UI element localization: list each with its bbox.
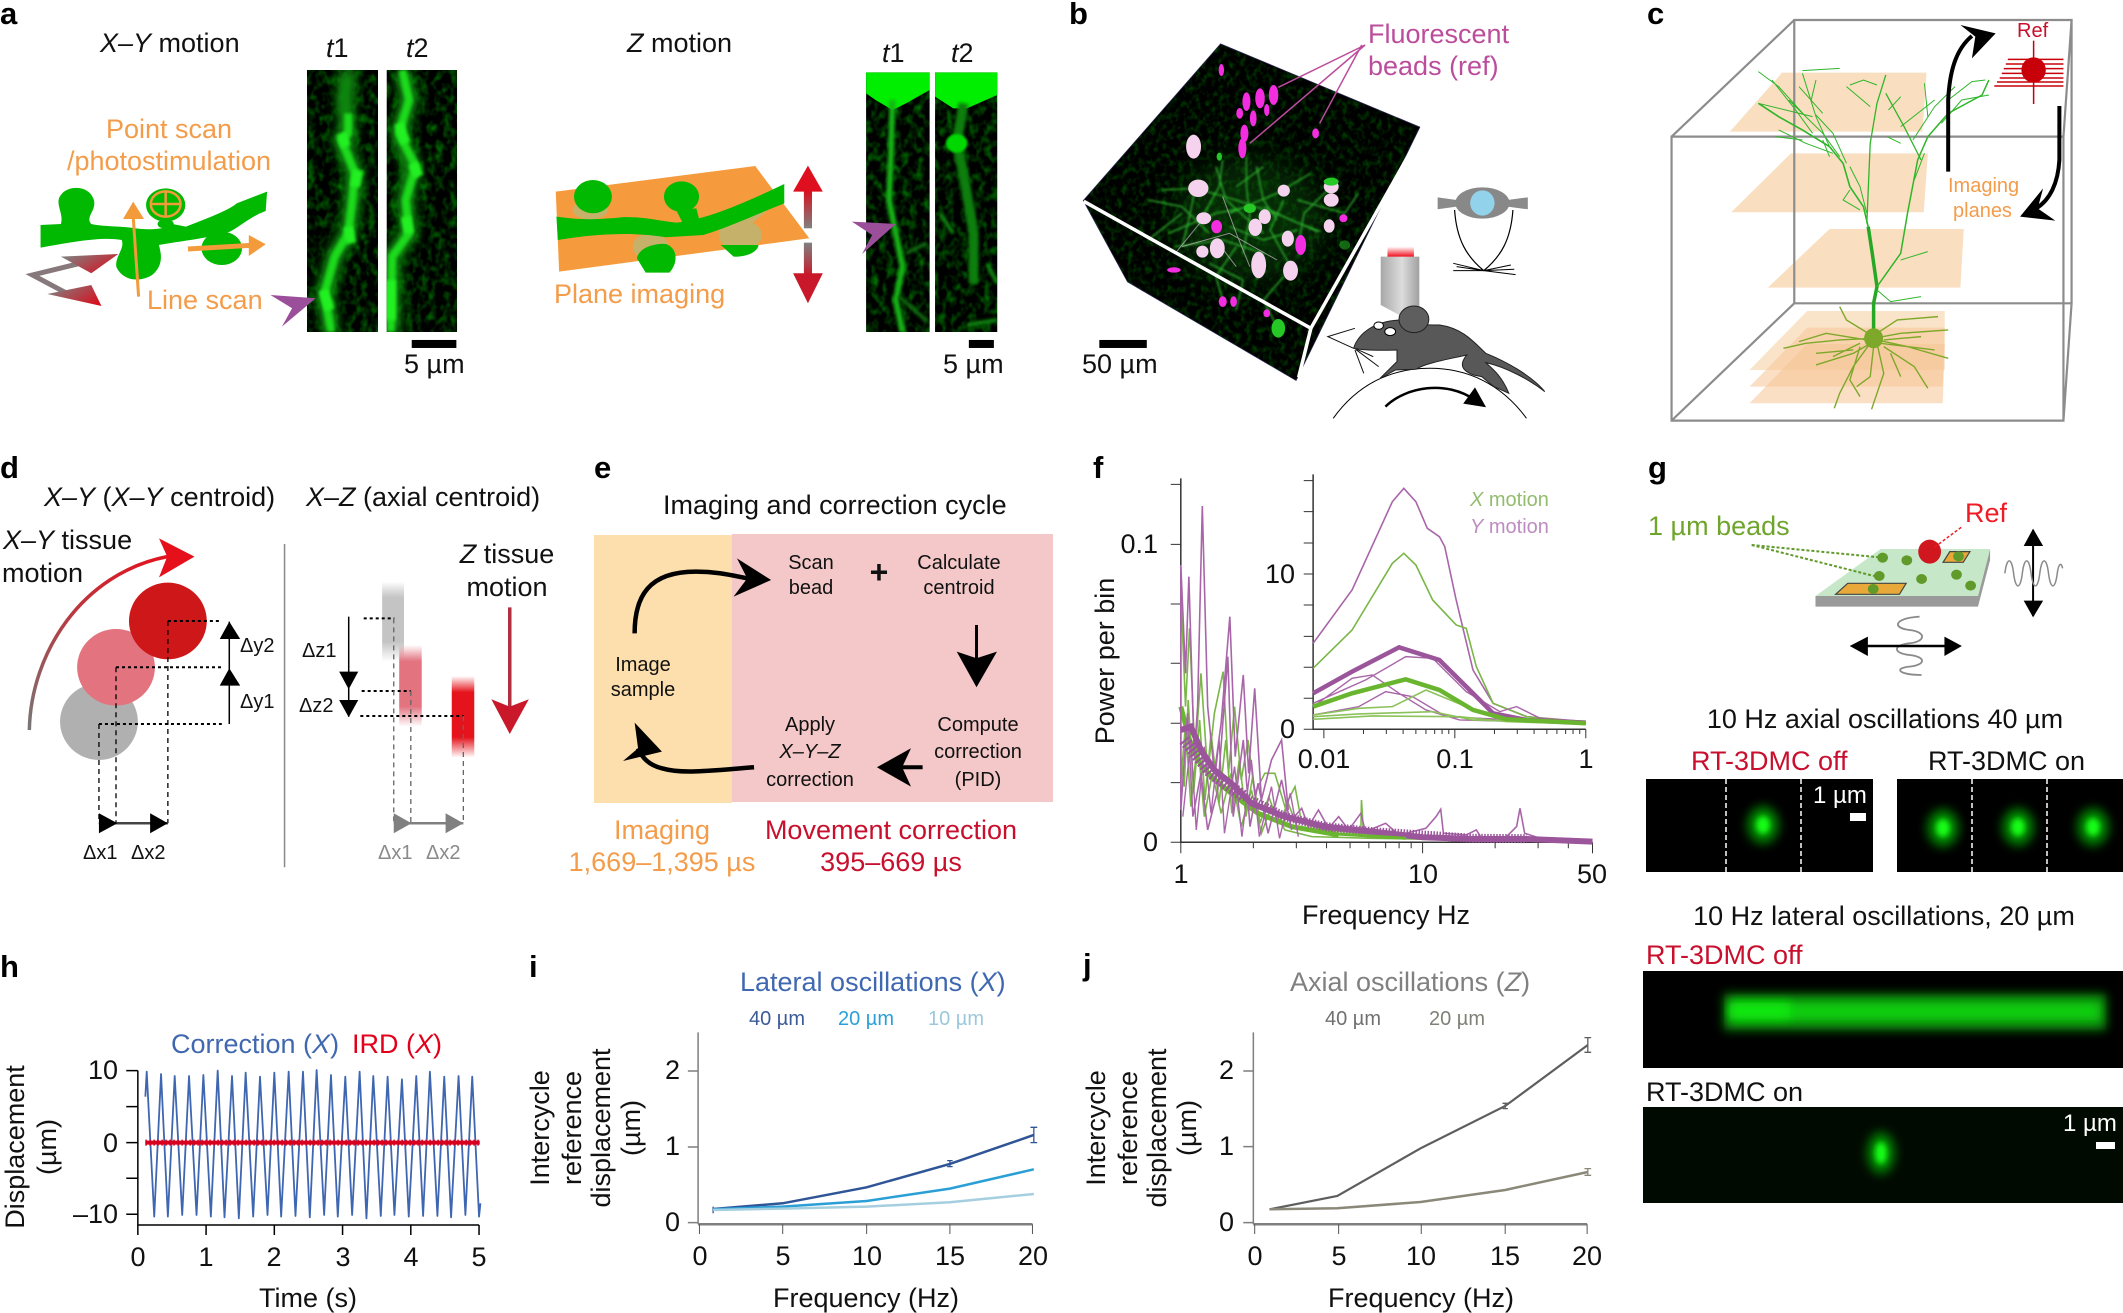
heading: Z motion: Z motion bbox=[626, 28, 732, 58]
panel h: correction trace bbox=[0, 949, 487, 1313]
arrow: vertical oscillation bbox=[2005, 529, 2063, 617]
label: line scan: Line scan bbox=[147, 285, 263, 315]
cycle arrows bbox=[623, 558, 997, 787]
step: compute: Compute bbox=[937, 714, 1019, 736]
chart i bbox=[688, 1032, 1037, 1234]
panel d: centroid tracking bbox=[0, 450, 554, 867]
drawings of panel c bbox=[1672, 20, 2072, 421]
label: z motion: motion bbox=[466, 572, 548, 602]
y title: (µm) bbox=[616, 1100, 646, 1156]
x labels: 4 bbox=[403, 1242, 419, 1272]
panel b: 3D bead stack bbox=[1069, 0, 1545, 418]
y title bbox=[1081, 1048, 1202, 1208]
arrow: left bbox=[877, 748, 923, 787]
main x labels: 50 bbox=[1577, 859, 1607, 889]
label: Ref: Ref bbox=[2017, 20, 2049, 42]
delta labels: Δz1 bbox=[302, 640, 336, 662]
legend 20: 20 µm bbox=[838, 1008, 894, 1030]
inset labels: 0.01 bbox=[1298, 744, 1350, 774]
panel f: power spectra bbox=[1090, 450, 1607, 930]
correction block bbox=[732, 534, 1053, 802]
x title: Frequency (Hz) bbox=[1328, 1283, 1514, 1313]
x labels: 0 bbox=[130, 1242, 146, 1272]
wireframe box bbox=[1672, 20, 2072, 421]
step: scan bead: bead bbox=[789, 577, 833, 599]
arrow: to scan bbox=[635, 558, 771, 633]
panel g: beads validation bbox=[1643, 450, 2123, 1203]
legend: IRD: IRD (X) bbox=[352, 1029, 442, 1059]
arrow: dx bbox=[99, 813, 168, 833]
label: plane imaging: Plane imaging bbox=[554, 279, 725, 309]
chart h bbox=[126, 1070, 480, 1235]
label: movement correction: Movement correction bbox=[765, 815, 1017, 845]
delta labels: Δx2 bbox=[131, 842, 165, 864]
arrow: red up/down bbox=[793, 166, 823, 303]
label h: h bbox=[0, 949, 19, 984]
main y labels: 0.1 bbox=[1120, 529, 1158, 559]
icon: objective bbox=[1381, 247, 1419, 315]
step: image sample: Image bbox=[615, 654, 671, 676]
drawings of panel b bbox=[1080, 43, 1545, 418]
main x labels: 1 bbox=[1173, 859, 1189, 889]
heading: axial: 10 Hz axial oscillations 40 µm bbox=[1707, 704, 2063, 734]
neuron bbox=[1758, 68, 1989, 409]
delta labels: Δx1 bbox=[378, 842, 412, 864]
x title: Time (s) bbox=[259, 1283, 357, 1313]
x title: Frequency (Hz) bbox=[773, 1283, 959, 1313]
icon: dendrite z bbox=[556, 180, 784, 273]
step: compute: (PID) bbox=[955, 769, 1001, 791]
y title: Displacement bbox=[0, 1065, 30, 1229]
arrow: up bbox=[1948, 25, 1996, 172]
arrow: dy bbox=[220, 622, 240, 724]
x labels: 15 bbox=[1490, 1241, 1520, 1271]
scale bar right bbox=[969, 340, 994, 348]
arrowhead: purple left bbox=[270, 295, 316, 327]
step: scan bead: Scan bbox=[788, 552, 834, 574]
legend 40: 40 µm bbox=[749, 1008, 805, 1030]
panel i: lateral oscillations bbox=[525, 949, 1048, 1313]
y labels: 0 bbox=[103, 1128, 118, 1158]
x labels: 1 bbox=[198, 1242, 214, 1272]
inset labels bbox=[1265, 559, 1594, 774]
arrow: tissue motion zigzag bbox=[32, 254, 118, 306]
x labels: 20 bbox=[1018, 1241, 1048, 1271]
y labels bbox=[1219, 1055, 1234, 1237]
x axis title: Frequency Hz bbox=[1302, 900, 1470, 930]
y labels: 0 bbox=[665, 1207, 680, 1237]
step: centroid: Calculate bbox=[917, 552, 1001, 574]
axial bars bbox=[382, 582, 474, 758]
label f: f bbox=[1093, 450, 1104, 485]
arrow: down bbox=[957, 625, 997, 687]
x labels bbox=[130, 1242, 487, 1272]
label: imaging time: 1,669–1,395 µs bbox=[569, 847, 755, 877]
label: z tissue: Z tissue bbox=[459, 539, 554, 569]
arrow: to image bbox=[623, 723, 754, 772]
heading e: Imaging and correction cycle bbox=[663, 490, 1007, 520]
arrow: dx gray bbox=[394, 813, 463, 833]
image: lateral on bbox=[1643, 1107, 2123, 1203]
x labels: 0 bbox=[692, 1241, 708, 1271]
legend 20: 20 µm bbox=[1429, 1008, 1485, 1030]
legend x motion: X motion bbox=[1469, 489, 1549, 511]
main y labels: 0 bbox=[1143, 827, 1158, 857]
delta labels: Δx2 bbox=[426, 842, 460, 864]
x labels bbox=[1247, 1241, 1602, 1271]
arrow: horizontal oscillation bbox=[1850, 617, 1962, 675]
icon: point scan crosshair bbox=[150, 191, 181, 217]
leader lines to beads bbox=[1250, 45, 1365, 143]
heading j: Axial oscillations (Z) bbox=[1290, 967, 1530, 997]
main y labels bbox=[1120, 529, 1158, 857]
inset labels: 1 bbox=[1578, 744, 1594, 774]
y title unit: (µm) bbox=[32, 1119, 62, 1175]
image: axial off bbox=[1646, 779, 1873, 872]
label: off: RT-3DMC off bbox=[1691, 746, 1848, 776]
delta labels: Δx1 bbox=[83, 842, 117, 864]
delta labels bbox=[83, 635, 460, 864]
label t2 left: t2 bbox=[406, 33, 429, 63]
drawings of panel a bbox=[32, 70, 997, 348]
label: point scan: Point scan bbox=[106, 114, 232, 144]
step: image sample: sample bbox=[611, 679, 675, 701]
panel c: neuron and imaging planes bbox=[1647, 0, 2072, 421]
inset labels: 10 bbox=[1265, 559, 1295, 589]
label e: e bbox=[594, 450, 611, 485]
y labels: 0 bbox=[1219, 1207, 1234, 1237]
delta labels: Δy1 bbox=[240, 691, 274, 713]
arrow: line scan bbox=[123, 202, 266, 297]
x labels: 3 bbox=[335, 1242, 351, 1272]
step: apply: correction bbox=[766, 769, 854, 791]
panel j: axial oscillations bbox=[1081, 947, 1602, 1313]
legend 10: 10 µm bbox=[928, 1008, 984, 1030]
IRD trace bbox=[145, 1141, 480, 1145]
schematic bbox=[1752, 527, 2063, 675]
image cube bbox=[1080, 43, 1423, 382]
label t1 left: t1 bbox=[326, 33, 349, 63]
icon: dendrite xy bbox=[41, 188, 267, 280]
scale label lateral: 1 µm bbox=[2063, 1110, 2117, 1137]
label: photostimulation: /photostimulation bbox=[67, 146, 271, 176]
x labels: 20 bbox=[1572, 1241, 1602, 1271]
main x labels bbox=[1173, 859, 1607, 889]
heading: X-Y motion: X–Y motion bbox=[99, 28, 240, 58]
y title bbox=[525, 1048, 646, 1208]
plots of panel f bbox=[1171, 474, 1593, 853]
label: on: RT-3DMC on bbox=[1928, 746, 2085, 776]
image: axial on bbox=[1897, 779, 2123, 872]
inset labels: 0.1 bbox=[1436, 744, 1474, 774]
scale label axial: 1 µm bbox=[1813, 782, 1867, 809]
legend 40: 40 µm bbox=[1325, 1008, 1381, 1030]
step: apply: Apply bbox=[785, 714, 835, 736]
label t1 right: t1 bbox=[882, 38, 905, 68]
series 20um bbox=[713, 1169, 1034, 1209]
scale label: 50 µm bbox=[1082, 349, 1158, 379]
icon: head plate bbox=[1438, 187, 1528, 275]
label: fluorescent beads: Fluorescent bbox=[1368, 19, 1510, 49]
series 40um bbox=[713, 1127, 1037, 1213]
label d: d bbox=[0, 450, 19, 485]
label: beads ref: beads (ref) bbox=[1368, 51, 1499, 81]
panel e: correction cycle bbox=[569, 450, 1053, 877]
series 40um bbox=[1269, 1038, 1591, 1209]
label i: i bbox=[529, 949, 538, 984]
icon: ref bead bbox=[1994, 41, 2063, 104]
y labels bbox=[73, 1055, 118, 1229]
y labels: –10 bbox=[73, 1199, 118, 1229]
scale bar bbox=[1099, 340, 1147, 348]
step: compute: correction bbox=[934, 741, 1022, 763]
label: ref: Ref bbox=[1965, 498, 2008, 528]
label: planes: planes bbox=[1953, 200, 2012, 222]
y title: Intercycle bbox=[1081, 1070, 1111, 1186]
arrow: dz bbox=[339, 617, 358, 717]
label: 1um beads: 1 µm beads bbox=[1648, 511, 1790, 541]
chart j bbox=[1243, 1032, 1591, 1234]
heading xy centroid: X–Y (X–Y centroid) bbox=[43, 482, 275, 512]
slide bbox=[1815, 540, 1990, 607]
y labels: 1 bbox=[1219, 1131, 1234, 1161]
image t1 right bbox=[866, 72, 930, 332]
arrow: down bbox=[2020, 106, 2059, 221]
y title: reference bbox=[557, 1071, 587, 1185]
scale label right: 5 µm bbox=[943, 349, 1004, 379]
image t2 left bbox=[387, 70, 457, 332]
label: xy tissue: X–Y tissue bbox=[2, 525, 132, 555]
arrow: z motion bbox=[491, 607, 529, 734]
x labels: 15 bbox=[935, 1241, 965, 1271]
scale bar left bbox=[412, 340, 456, 348]
label g: g bbox=[1648, 450, 1667, 485]
y labels: 1 bbox=[665, 1131, 680, 1161]
scale label left: 5 µm bbox=[404, 349, 465, 379]
y labels: 10 bbox=[88, 1055, 118, 1085]
guide lines bbox=[99, 621, 222, 823]
x labels: 5 bbox=[471, 1242, 487, 1272]
label t2 right: t2 bbox=[951, 38, 974, 68]
imaging planes bbox=[1730, 73, 1964, 403]
image t1 left bbox=[307, 70, 378, 332]
image: lateral off bbox=[1643, 971, 2123, 1068]
heading i: Lateral oscillations (X) bbox=[740, 967, 1006, 997]
inset chart bbox=[1304, 474, 1586, 738]
legend y motion: Y motion bbox=[1470, 516, 1549, 538]
icon: mouse bbox=[1328, 306, 1545, 393]
y title: displacement bbox=[1142, 1048, 1172, 1208]
x labels: 2 bbox=[266, 1242, 282, 1272]
y title: Intercycle bbox=[525, 1070, 555, 1186]
x labels: 5 bbox=[775, 1241, 791, 1271]
correction trace bbox=[145, 1070, 480, 1218]
drawings of panel d bbox=[29, 538, 529, 867]
divider bbox=[284, 544, 286, 867]
label j: j bbox=[1082, 947, 1092, 982]
label: on lateral: RT-3DMC on bbox=[1646, 1077, 1803, 1107]
delta labels: Δz2 bbox=[299, 695, 333, 717]
label: imaging: Imaging bbox=[614, 815, 710, 845]
x labels: 10 bbox=[852, 1241, 882, 1271]
arc arrow bbox=[29, 538, 194, 730]
y labels: 2 bbox=[665, 1055, 680, 1085]
image t2 right bbox=[935, 72, 997, 332]
heading xz centroid: X–Z (axial centroid) bbox=[305, 482, 540, 512]
scale bar axial bbox=[1850, 813, 1866, 821]
inset labels: 0 bbox=[1280, 714, 1295, 744]
x labels: 0 bbox=[1247, 1241, 1263, 1271]
delta labels: Δy2 bbox=[240, 635, 274, 657]
label: off lateral: RT-3DMC off bbox=[1646, 940, 1803, 970]
label: imaging: Imaging bbox=[1948, 175, 2019, 197]
x labels: 5 bbox=[1331, 1241, 1347, 1271]
guide lines axial bbox=[360, 618, 464, 823]
series 20um bbox=[1269, 1169, 1591, 1209]
heading: lateral: 10 Hz lateral oscillations, 20 µm bbox=[1693, 901, 2075, 931]
plus: + bbox=[870, 554, 888, 590]
x labels: 10 bbox=[1406, 1241, 1436, 1271]
arrowhead: purple right bbox=[852, 222, 896, 254]
y labels: 2 bbox=[1219, 1055, 1234, 1085]
step: centroid: centroid bbox=[923, 577, 995, 599]
label: correction time: 395–669 µs bbox=[820, 847, 962, 877]
main chart bbox=[1171, 478, 1593, 853]
imaging block bbox=[594, 535, 732, 803]
main x labels: 10 bbox=[1408, 859, 1438, 889]
y title: displacement bbox=[586, 1048, 616, 1208]
label: motion: motion bbox=[2, 558, 83, 588]
x labels bbox=[692, 1241, 1048, 1271]
step: apply: X–Y–Z bbox=[778, 741, 841, 763]
imaging plane bbox=[556, 166, 809, 272]
legend: correction: Correction (X) bbox=[171, 1029, 339, 1059]
scale bar lateral bbox=[2096, 1142, 2115, 1149]
icon: wheel bbox=[1333, 368, 1526, 418]
panel a: motion types bbox=[0, 0, 1004, 379]
y axis title: Power per bin bbox=[1090, 578, 1120, 744]
y title: (µm) bbox=[1172, 1100, 1202, 1156]
bead positions bbox=[60, 583, 207, 760]
series 10um bbox=[713, 1194, 1034, 1210]
y labels bbox=[665, 1055, 680, 1237]
leader lines bbox=[1752, 545, 1879, 576]
y title: reference bbox=[1113, 1071, 1143, 1185]
